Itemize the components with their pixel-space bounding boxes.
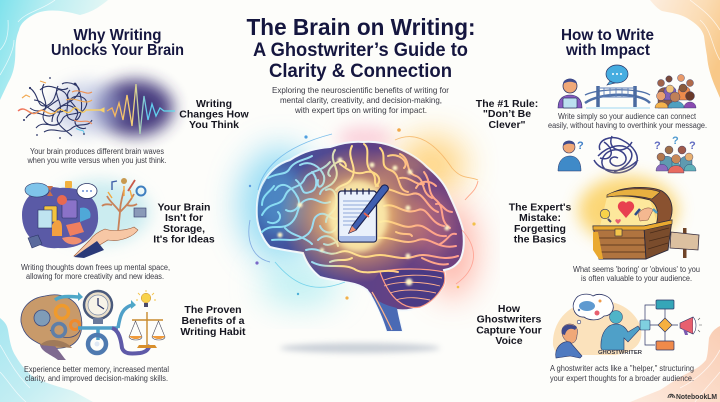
caption: write simply: Write simply so your audience can connect bbox=[558, 112, 697, 121]
panel: how to write with impact bbox=[476, 27, 707, 383]
label: the #1 rule bbox=[476, 98, 538, 131]
label: the #1 rule: Clever" bbox=[488, 119, 526, 131]
label: how ghostwriters capture your voice: Capture Your bbox=[476, 324, 542, 336]
logo: NotebookLM: NotebookLM bbox=[676, 392, 717, 401]
illustration: central glowing brain with notepad bbox=[238, 126, 478, 353]
label: the expert's mistake: the Basics bbox=[514, 234, 566, 246]
label: your brain isn't for storage: Isn't for bbox=[165, 212, 203, 224]
label: your brain isn't for storage: It's for Ideas bbox=[153, 234, 215, 246]
caption: boring or obvious bbox=[573, 265, 700, 283]
panel: why writing unlocks your brain bbox=[18, 27, 250, 383]
label: your brain isn't for storage: Your Brain bbox=[158, 202, 210, 214]
caption: brain waves: Your brain produces different brain waves bbox=[30, 147, 164, 156]
caption: write simply bbox=[548, 112, 707, 130]
brain folds bbox=[262, 144, 458, 272]
label: the #1 rule: The #1 Rule: bbox=[476, 98, 538, 110]
caption: boring or obvious: is often valuable to your audience. bbox=[581, 274, 692, 283]
heading: how to write: with Impact bbox=[565, 42, 650, 59]
caption: mental space: Writing thoughts down frees up mental space, bbox=[21, 263, 170, 272]
icon: expert, ghostwriter, flowchart and megaphone: GHOSTWRITER bbox=[598, 350, 643, 356]
subtitle: with expert tips on writing for impact. bbox=[294, 105, 427, 115]
label: writing changes how you think: Writing bbox=[196, 98, 232, 110]
label: the expert's mistake bbox=[509, 202, 571, 246]
title: The Brain on Writing: bbox=[246, 14, 476, 40]
label: proven benefits bbox=[180, 304, 246, 338]
label: how ghostwriters capture your voice: How bbox=[498, 303, 521, 315]
icon: confused writer, tangle and audience: ? bbox=[689, 140, 696, 152]
icon: notepad and pen bbox=[328, 180, 388, 252]
icon: cluttered mind, idea tree and open hand bbox=[22, 178, 150, 258]
icon: confused writer, tangle and audience: ? bbox=[672, 135, 679, 147]
title: A Ghostwriter’s Guide to bbox=[253, 40, 468, 61]
icon: confused writer, tangle and audience: ? bbox=[654, 140, 661, 152]
label: proven benefits: Benefits of a bbox=[181, 315, 245, 327]
title: Clarity & Connection bbox=[269, 61, 452, 82]
icon: expert, ghostwriter, flowchart and megaphone bbox=[553, 294, 702, 358]
caption: better memory: clarity, and improved decision-making skills. bbox=[25, 374, 168, 383]
icon: brain gears, clock, scale and lightbulb bbox=[21, 290, 165, 360]
label: your brain isn't for storage: Storage, bbox=[163, 223, 205, 235]
caption: mental space: allowing for more creativity and new ideas. bbox=[26, 272, 164, 281]
icon: treasure chest and blank sign bbox=[578, 176, 699, 259]
subtitle: mental clarity, creativity, and decision-making, bbox=[280, 95, 442, 105]
heading: how to write bbox=[561, 27, 654, 59]
title bbox=[246, 14, 476, 82]
subtitle: Exploring the neuroscientific benefits of writing for bbox=[272, 85, 449, 95]
icon: tangled thoughts become brain waves bbox=[18, 77, 175, 139]
heading: why writing bbox=[51, 27, 184, 59]
label: how ghostwriters capture your voice: Voice bbox=[495, 335, 523, 347]
label: the expert's mistake: Mistake: bbox=[519, 212, 561, 224]
label: proven benefits: Writing Habit bbox=[180, 326, 246, 338]
label: proven benefits: The Proven bbox=[184, 304, 242, 316]
subtitle bbox=[272, 85, 449, 115]
icon: writer, bridge and audience bbox=[558, 65, 696, 108]
caption: brain waves bbox=[27, 147, 166, 165]
label: the expert's mistake: Forgetting bbox=[514, 223, 566, 235]
label: writing changes how you think: You Think bbox=[189, 119, 239, 131]
caption: mental space bbox=[21, 263, 170, 281]
caption: ghostwriter as helper: A ghostwriter acts like a "helper," structuring bbox=[550, 364, 694, 373]
label: how ghostwriters capture your voice: Ghostwriters bbox=[477, 314, 542, 326]
caption: brain waves: when you write versus when you just think. bbox=[27, 156, 166, 165]
label: the #1 rule: "Don’t Be bbox=[483, 108, 531, 120]
icon: confused writer, tangle and audience bbox=[558, 135, 696, 173]
heading: why writing: Unlocks Your Brain bbox=[51, 42, 184, 59]
label: writing changes how you think bbox=[179, 98, 250, 131]
caption: ghostwriter as helper: your expert thoughts for a broader audience. bbox=[550, 374, 694, 383]
caption: better memory: Experience better memory, increased mental bbox=[24, 365, 169, 374]
caption: ghostwriter as helper bbox=[550, 364, 694, 383]
label: the expert's mistake: The Expert's bbox=[509, 202, 571, 214]
heading: how to write: How to Write bbox=[561, 27, 654, 44]
caption: boring or obvious: What seems 'boring' or 'obvious' to you bbox=[573, 265, 700, 274]
heading: why writing: Why Writing bbox=[74, 27, 162, 44]
caption: write simply: easily, without having to overthink your message. bbox=[548, 121, 707, 130]
label: your brain isn't for storage bbox=[153, 202, 215, 246]
icon: confused writer, tangle and audience: ? bbox=[577, 140, 584, 152]
label: how ghostwriters capture your voice bbox=[476, 303, 542, 347]
label: writing changes how you think: Changes How bbox=[179, 108, 250, 120]
caption: better memory bbox=[24, 365, 169, 383]
